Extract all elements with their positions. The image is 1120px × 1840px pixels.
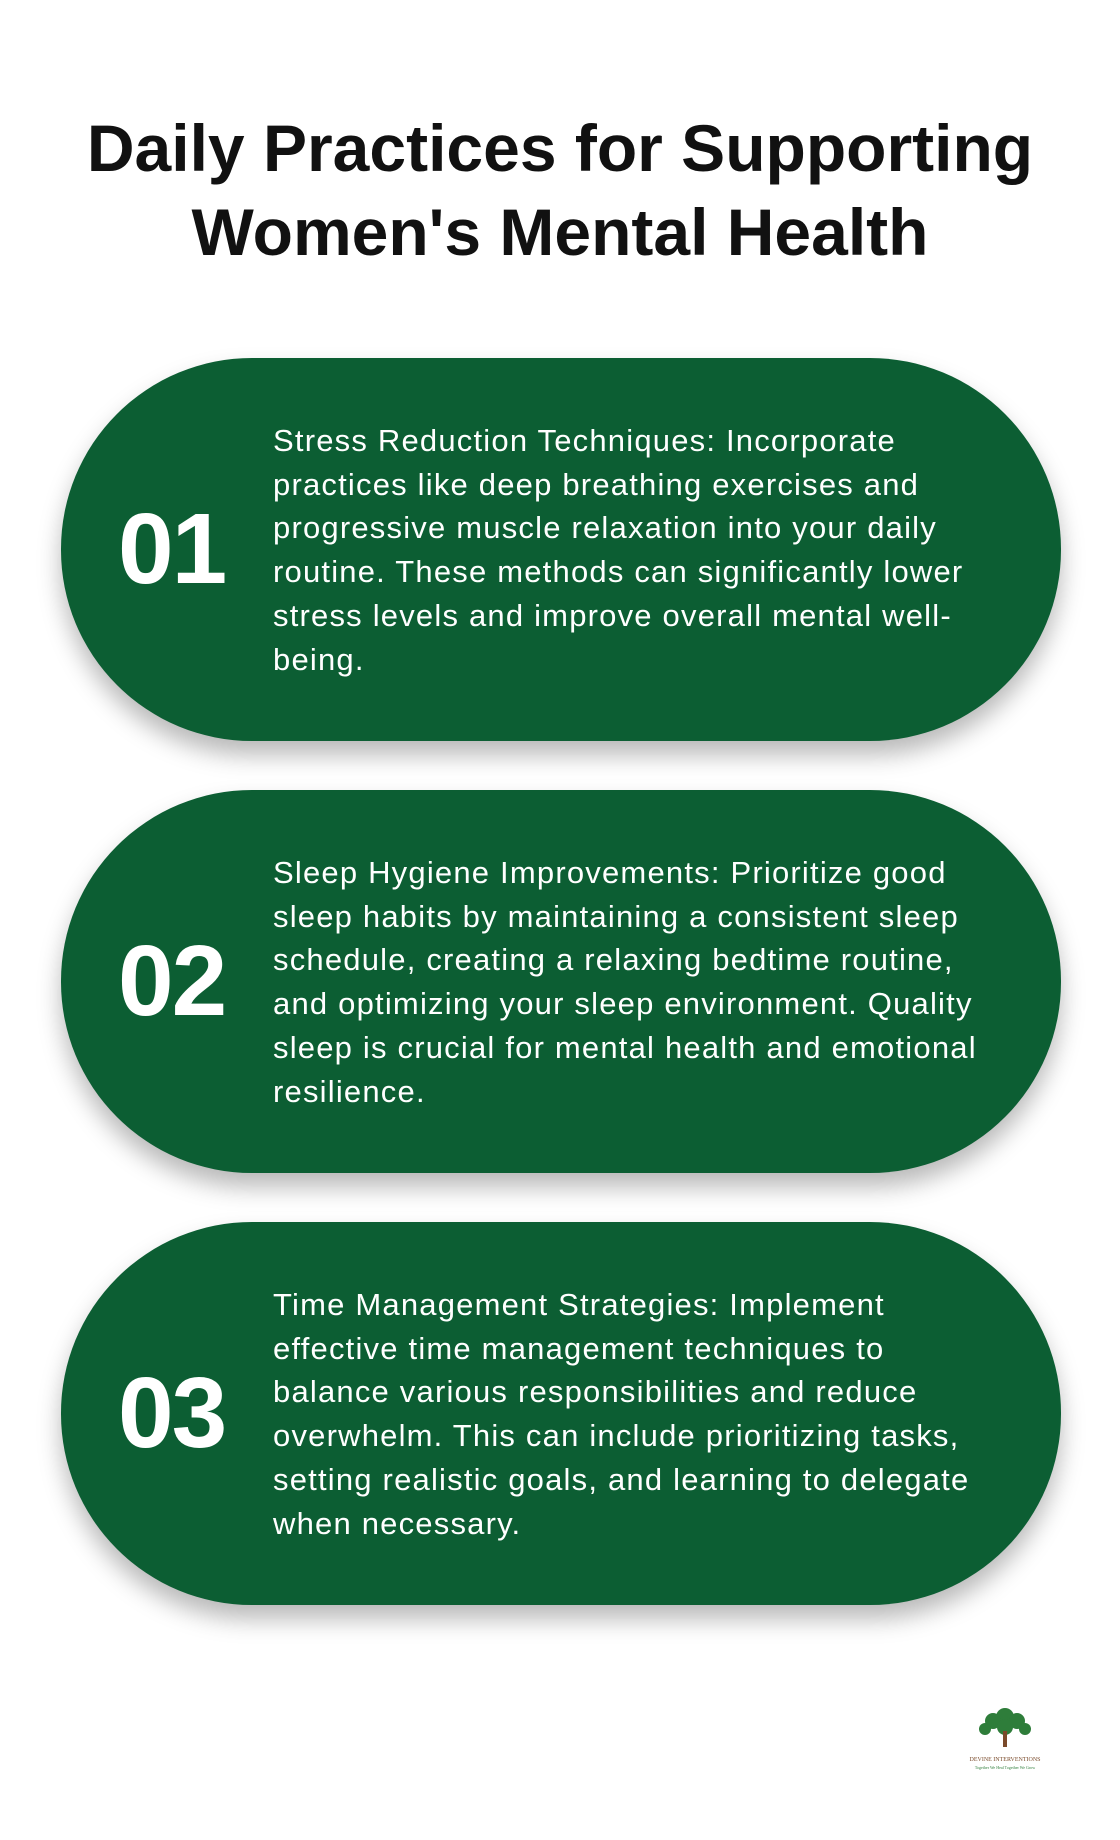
text 01: stress levels and improve overall mental well-	[273, 598, 952, 633]
title: Daily Practices for Supporting	[87, 111, 1033, 185]
text 02: sleep habits by maintaining a consistent sleep	[273, 899, 959, 934]
text 02: resilience.	[273, 1074, 426, 1109]
logo: Together We Heal Together We Grow	[975, 1765, 1035, 1770]
logo	[969, 1708, 1041, 1770]
text 02: and optimizing your sleep environment. Quality	[273, 986, 973, 1021]
text 01: being.	[273, 642, 365, 677]
title: Women's Mental Health	[192, 195, 928, 269]
text 02: schedule, creating a relaxing bedtime routine,	[273, 942, 954, 977]
text 01: Stress Reduction Techniques: Incorporate	[273, 423, 896, 458]
text 02: Sleep Hygiene Improvements: Prioritize good	[273, 855, 947, 890]
panel: 01 stress reduction	[61, 358, 1061, 741]
number 03: 03	[118, 1357, 225, 1469]
text 01: routine. These methods can significantly lower	[273, 554, 963, 589]
panel: 03 time management	[61, 1222, 1061, 1605]
text 03: when necessary.	[273, 1506, 521, 1541]
text 02: sleep is crucial for mental health and emotional	[273, 1030, 977, 1065]
text 03: effective time management techniques to	[273, 1331, 884, 1366]
text 01: practices like deep breathing exercises and	[273, 467, 919, 502]
title	[87, 111, 1033, 269]
text 03: balance various responsibilities and reduce	[273, 1374, 917, 1409]
panel: 02 sleep hygiene	[61, 790, 1061, 1173]
text 02	[273, 855, 977, 1109]
text 01: progressive muscle relaxation into your daily	[273, 510, 937, 545]
text 03: setting realistic goals, and learning to delegate	[273, 1462, 969, 1497]
text 03: overwhelm. This can include prioritizing tasks,	[273, 1418, 959, 1453]
logo: DEVINE INTERVENTIONS	[969, 1757, 1041, 1763]
number 02: 02	[118, 925, 225, 1037]
number 01: 01	[118, 493, 225, 605]
text 01	[273, 423, 963, 677]
text 03: Time Management Strategies: Implement	[273, 1287, 885, 1322]
text 03	[273, 1287, 969, 1541]
